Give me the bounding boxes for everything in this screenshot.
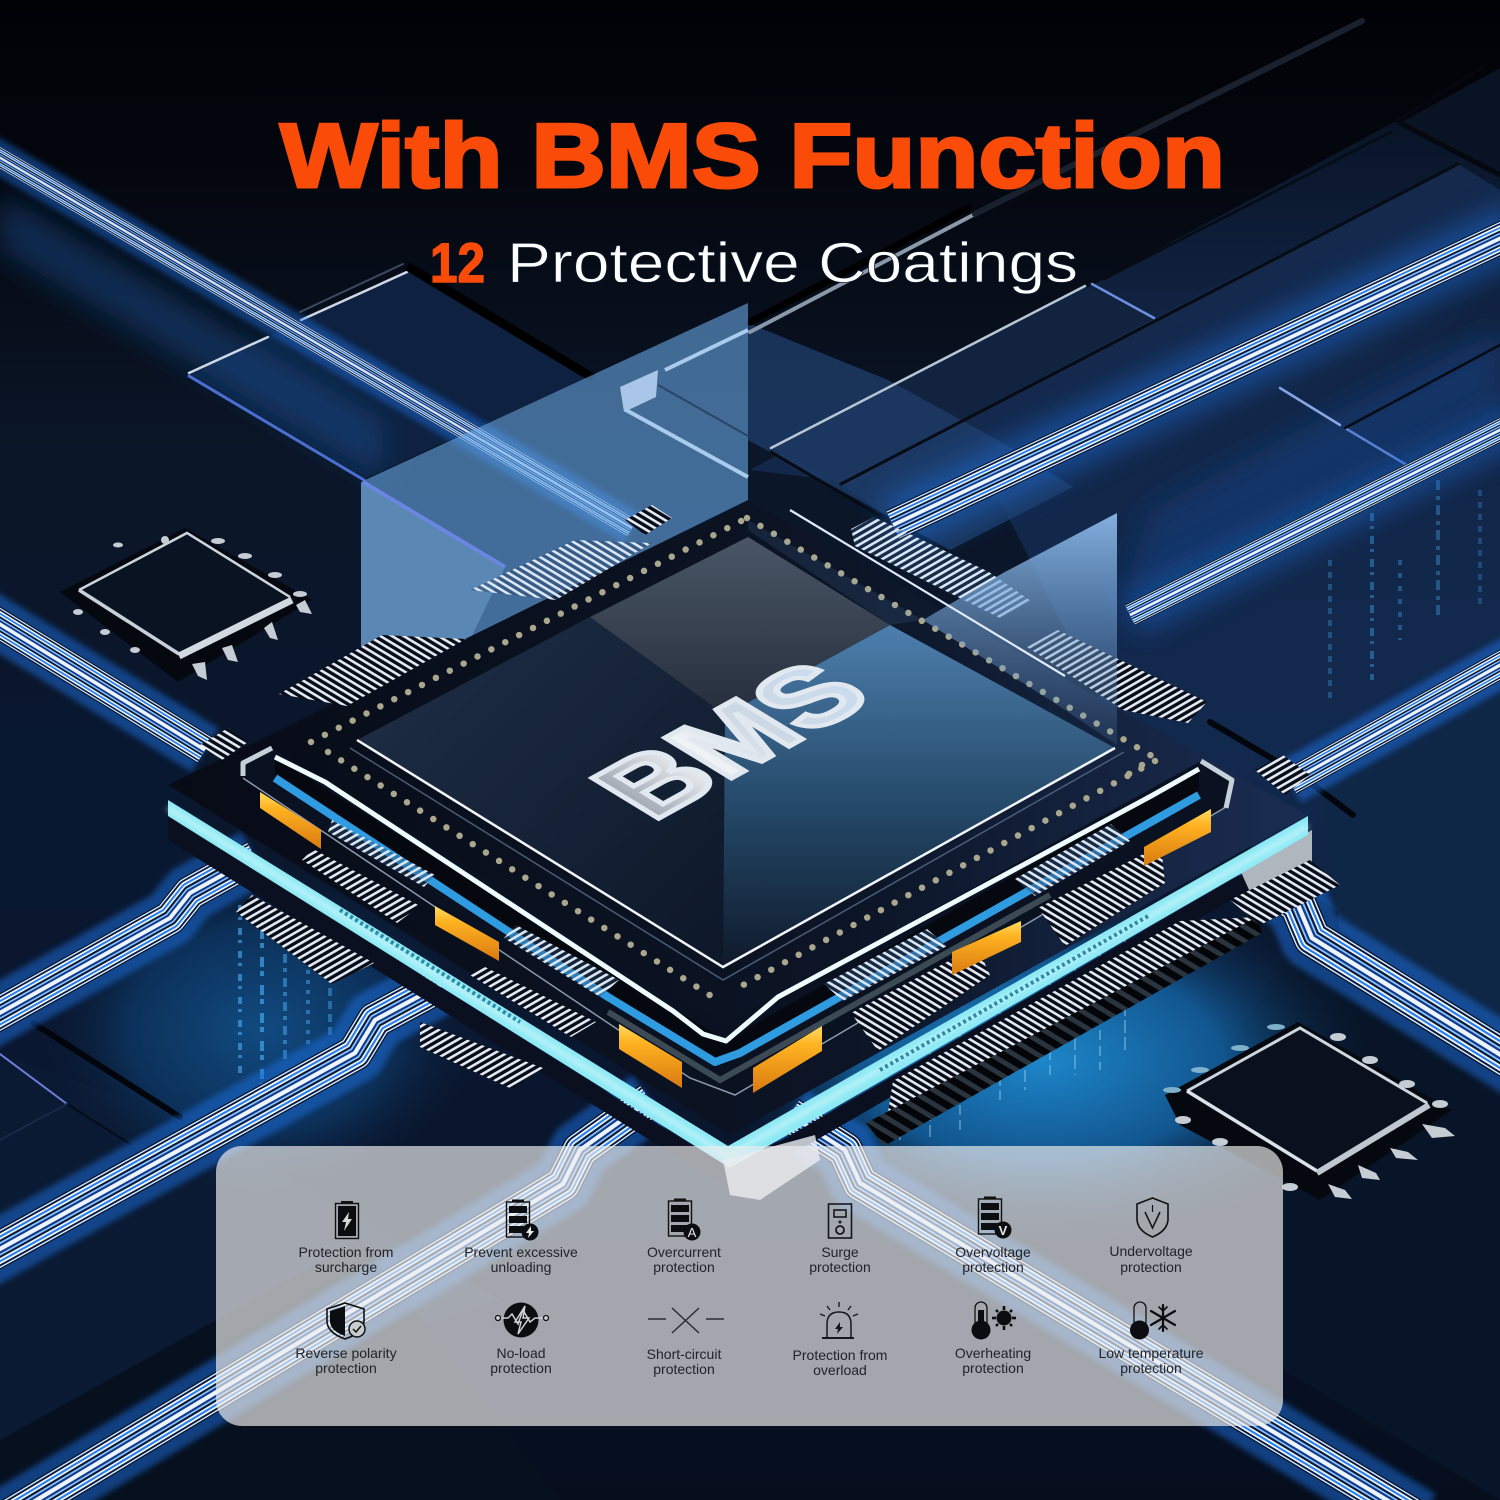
item: reverse polarity protection: protection [315,1360,377,1376]
circuit bundle: left upper [0,857,255,1024]
chip pins: under the edge [236,860,1340,1200]
circuit bundle: lower right [1245,868,1500,1070]
item: reverse polarity protection [295,1303,397,1376]
item: no-load protection [490,1302,552,1376]
item: low temperature protection: Low temperature [1098,1345,1204,1361]
chip: gold contact blocks [260,792,1211,1093]
item: prevent excessive unloading: unloading [491,1259,551,1275]
background circuit lines and edges [0,21,1500,1144]
item: overcurrent protection: A [688,1225,697,1240]
item: no-load protection: protection [490,1360,552,1376]
item: low temperature protection: protection [1120,1360,1182,1376]
circuit bundle: bottom left [0,1100,650,1500]
small chip: top left [60,528,312,682]
blue dotted trace textures [240,480,1480,1140]
circuit bundle: bottom right [790,1115,1420,1500]
item: overcurrent protection [647,1198,721,1275]
circuit bundle: right third [1290,654,1500,782]
item: short-circuit protection [647,1308,724,1377]
item: protection from surcharge: Protection from [299,1244,393,1260]
small chip: bottom right [1163,1022,1455,1200]
item: undervoltage protection [1109,1198,1193,1275]
item: prevent excessive unloading: Prevent excessive [464,1244,578,1260]
chip: BMS die [350,537,1124,980]
item: overheating protection [955,1302,1031,1376]
item: overcurrent protection: protection [653,1259,715,1275]
item: protection from overload: overload [813,1362,867,1378]
item: surge protection [809,1204,871,1275]
item: surge protection: protection [809,1259,871,1275]
circuit bundle: left middle [0,612,205,750]
item: protection from surcharge [299,1201,393,1275]
BMS label: BMS [566,646,897,835]
item: overvoltage protection: Overvoltage [955,1244,1031,1260]
item: overcurrent protection: Overcurrent [647,1244,721,1260]
item: overheating protection: protection [962,1360,1024,1376]
chip: base and glowing edge [168,500,1312,1190]
circuit bundle: right second [1130,420,1500,615]
chip: recessed channel with bands [243,748,1232,1097]
item: undervoltage protection: protection [1120,1259,1182,1275]
circuit bundle: top left [0,146,632,528]
item: no-load protection: No-load [496,1345,546,1361]
item: protection from overload [793,1302,887,1378]
item: low temperature protection [1098,1302,1204,1376]
item: surge protection: Surge [821,1244,859,1260]
item: prevent excessive unloading [464,1200,578,1275]
chip: side comb contacts [302,820,1165,1051]
circuit bundle: left lower [0,985,440,1260]
panel: protection functions [216,1146,1283,1426]
item: overvoltage protection: protection [962,1259,1024,1275]
item: short-circuit protection: Short-circuit [647,1346,721,1362]
title: With BMS Function [280,106,1225,207]
item: reverse polarity protection: Reverse polarity [295,1345,397,1361]
item: undervoltage protection: Undervoltage [1109,1243,1193,1259]
chip: solder dot ring [311,518,1157,1001]
subtitle: 12 [430,231,485,294]
item: overheating protection: Overheating [955,1345,1031,1361]
item: short-circuit protection: protection [653,1361,715,1377]
chip pins: top groups [200,505,1310,795]
subtitle: Protective Coatings [507,231,1078,295]
item: protection from overload: Protection from [793,1347,887,1363]
item: protection from surcharge: surcharge [315,1259,377,1275]
item: overvoltage protection: V [999,1223,1008,1238]
glass panel: right [748,303,1117,745]
glass panel: upper left [361,303,748,700]
item: overvoltage protection [955,1196,1031,1275]
circuit bundle: top right [893,229,1500,525]
